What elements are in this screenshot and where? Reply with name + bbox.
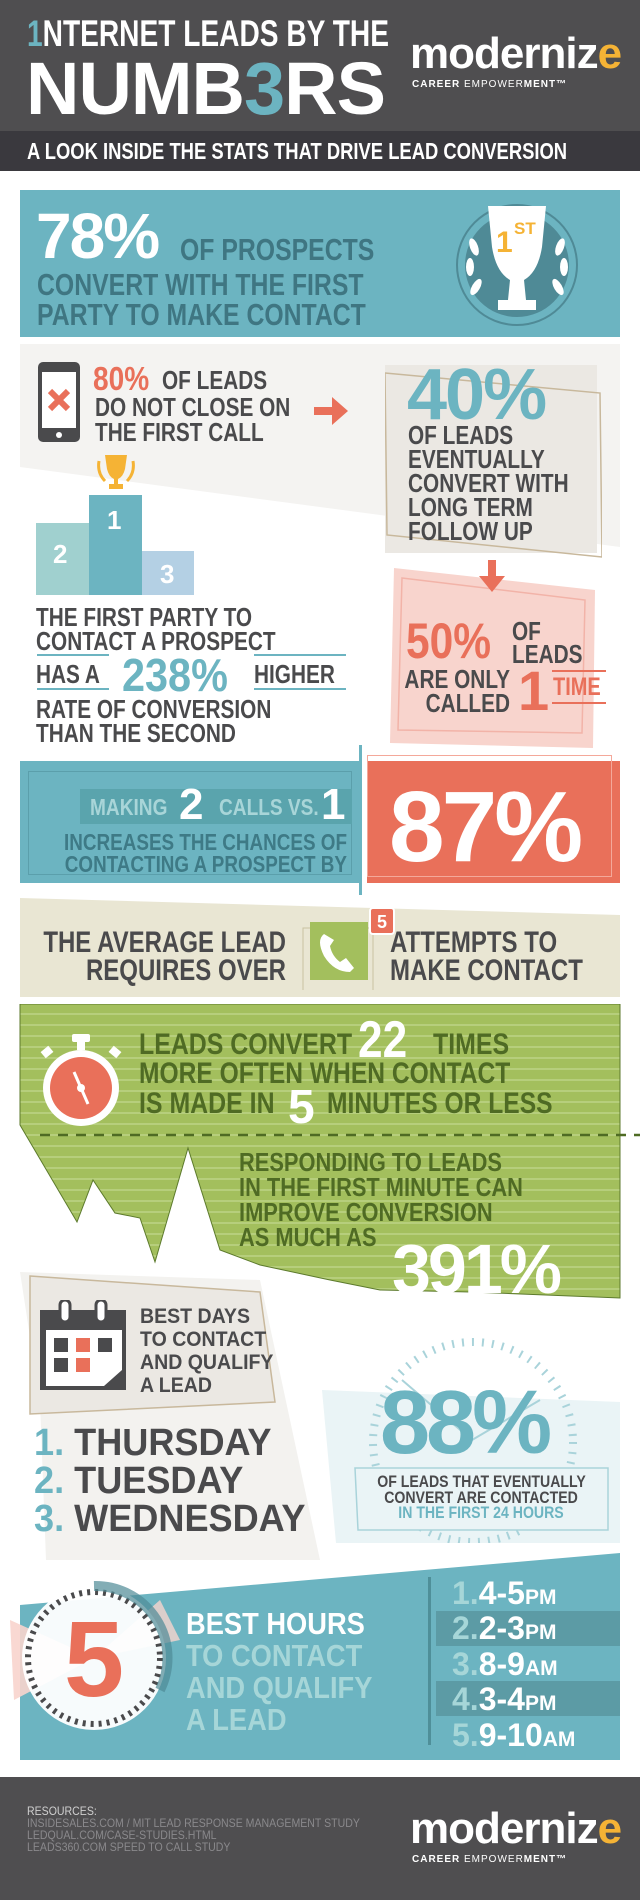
list: best hours: 4.3-4PM: [452, 1681, 556, 1717]
panel: best days: BEST DAYS: [140, 1305, 250, 1328]
panel: 50% called once: 1: [518, 659, 549, 722]
panel: best days: TO CONTACT: [140, 1328, 266, 1351]
panel: 87%: 87%: [389, 771, 580, 883]
text: 238% higher rate: THE FIRST PARTY TO: [36, 602, 252, 632]
panel: 2 calls vs 1: CONTACTING A PROSPECT BY: [65, 851, 347, 877]
list: best hours: 1.4-5PM: [452, 1575, 556, 1611]
panel: best hours: [10, 1553, 620, 1760]
panel: 87%: [367, 761, 620, 883]
resources: RESOURCES:: [27, 1804, 97, 1818]
panel: green 5 minutes / first minute: 22: [358, 1011, 407, 1069]
panel: best days: AND QUALIFY: [140, 1351, 273, 1374]
stat 78%: 78%: [36, 200, 158, 272]
icon: clock with 5: 5: [64, 1598, 124, 1719]
icon: calendar: [40, 1300, 126, 1390]
panel: 2 calls vs 1: CALLS VS.: [219, 794, 319, 820]
text: 238% higher rate: HIGHER: [254, 659, 335, 689]
text: 238% higher rate: [36, 602, 346, 748]
arrow: down: [479, 560, 505, 592]
icon: trophy 1st: ST: [514, 219, 536, 238]
list: best hours: 2.2-3PM: [452, 1610, 556, 1646]
icon: phone with badge 5: [302, 908, 395, 990]
icon: trophy 1st: 1: [496, 226, 513, 259]
icon: phone with badge 5: 5: [377, 912, 387, 932]
panel: green 5 minutes / first minute: 5: [288, 1081, 315, 1134]
panel: 88% first 24 hours: CONVERT ARE CONTACTED: [384, 1488, 578, 1506]
panel: 40% long term follow up: LONG TERM: [408, 492, 533, 522]
panel: 2 calls vs 1: MAKING: [90, 794, 167, 820]
panel: green 5 minutes / first minute: IS MADE IN: [139, 1087, 275, 1120]
panel: best hours: A LEAD: [186, 1702, 287, 1737]
list: best hours: [436, 1575, 620, 1753]
panel: 50% called once: ARE ONLY: [404, 664, 510, 694]
footer: [0, 1777, 640, 1900]
text 78%: PARTY TO MAKE CONTACT: [37, 297, 366, 332]
panel: average lead 5 attempts: REQUIRES OVER: [86, 954, 286, 987]
text: 80% of leads: OF LEADS: [162, 365, 267, 395]
panel: 50% called once: LEADS: [512, 639, 582, 669]
panel background: section 2: [20, 344, 620, 547]
panel: 50% called once: OF: [512, 616, 541, 646]
panel: 50% called once: 50%: [406, 613, 491, 669]
text: 80% of leads: 80%: [93, 360, 149, 397]
header: [0, 0, 640, 131]
panel: 50% called once: CALLED: [426, 688, 510, 718]
panel: 88% first 24 hours: [322, 1338, 620, 1543]
panel: green 5 minutes / first minute: 391%: [392, 1230, 559, 1308]
logo: CAREER EMPOWERMENT™: [412, 79, 567, 90]
text 78%: OF PROSPECTS: [180, 232, 374, 267]
panel: average lead 5 attempts: MAKE CONTACT: [390, 954, 583, 987]
panel: 88% first 24 hours: IN THE FIRST 24 HOURS: [398, 1503, 564, 1522]
logo: CAREER EMPOWERMENT™: [412, 1854, 567, 1865]
panel: 78% first party: [20, 190, 620, 337]
panel: green 5 minutes / first minute: MORE OFTEN WHEN CONTACT: [139, 1057, 510, 1090]
panel: best days: 1. THURSDAY: [34, 1422, 271, 1464]
panel: average lead 5 attempts: ATTEMPTS TO: [390, 926, 557, 959]
text: 80% of leads: THE FIRST CALL: [95, 417, 264, 447]
icon: gold trophy: [97, 455, 135, 489]
resources: LEADS360.COM SPEED TO CALL STUDY: [27, 1840, 230, 1854]
podium with trophy: 1: [107, 505, 121, 535]
icon: stopwatch: [40, 1034, 122, 1126]
panel: 2 calls vs 1: [20, 761, 360, 883]
panel: best days: 3. WEDNESDAY: [34, 1498, 306, 1540]
icon: clock with 5: [10, 1581, 180, 1730]
panel: 40% long term follow up: [385, 355, 602, 558]
panel: 40% long term follow up: FOLLOW UP: [408, 516, 533, 546]
arrow: right: [314, 397, 348, 425]
panel: green 5 minutes / first minute: LEADS CONVERT: [139, 1028, 352, 1061]
panel: 50% called once: [390, 568, 606, 748]
resources: LEDQUAL.COM/CASE-STUDIES.HTML: [27, 1828, 217, 1842]
panel: best days: 2. TUESDAY: [34, 1460, 243, 1502]
panel: 40% long term follow up: OF LEADS: [408, 420, 513, 450]
panel: 2 calls vs 1: 2: [179, 780, 203, 829]
panel: green 5 minutes / first minute: IMPROVE CONVERSION: [239, 1197, 493, 1227]
panel: green 5 minutes / first minute: [20, 1004, 640, 1308]
panel: average lead 5 attempts: THE AVERAGE LEAD: [43, 926, 286, 959]
panel: green 5 minutes / first minute: TIMES: [433, 1028, 509, 1061]
text: 238% higher rate: RATE OF CONVERSION: [36, 694, 271, 724]
resources: [27, 1804, 360, 1854]
subtitle bar: A LOOK INSIDE THE STATS THAT DRIVE LEAD CONVERSION: [27, 138, 567, 164]
panel: best hours: BEST HOURS: [186, 1606, 365, 1641]
text: 80% of leads: [93, 360, 290, 447]
panel: 40% long term follow up: 40%: [407, 355, 545, 435]
panel: 40% long term follow up: CONVERT WITH: [408, 468, 569, 498]
panel: 88% first 24 hours: OF LEADS THAT EVENTUALLY: [377, 1472, 586, 1491]
text 78%: [37, 232, 374, 332]
logo: modernize: [410, 1804, 621, 1853]
list: best hours: 3.8-9AM: [452, 1646, 558, 1682]
panel: green 5 minutes / first minute: MINUTES OR LESS: [327, 1087, 553, 1120]
icon: trophy 1st: [456, 204, 578, 326]
panel: best hours: TO CONTACT: [186, 1638, 362, 1673]
panel: green 5 minutes / first minute: IN THE FIRST MINUTE CAN: [239, 1172, 523, 1202]
icon: phone with x: [38, 362, 80, 442]
text: 238% higher rate: 238%: [122, 649, 228, 701]
divider line: [359, 745, 362, 895]
panel: best days: [20, 1272, 320, 1560]
logo: modernize: [410, 29, 621, 78]
text: 238% higher rate: THAN THE SECOND: [36, 718, 236, 748]
podium with trophy: [36, 455, 194, 595]
panel: best hours: AND QUALIFY: [186, 1670, 372, 1705]
text 78%: CONVERT WITH THE FIRST: [37, 267, 364, 302]
panel: 2 calls vs 1: INCREASES THE CHANCES OF: [64, 829, 347, 855]
podium with trophy: 2: [53, 539, 67, 569]
resources: INSIDESALES.COM / MIT LEAD RESPONSE MANAGEMENT STUDY: [27, 1816, 360, 1830]
panel: 2 calls vs 1: 1: [321, 780, 345, 829]
subtitle bar: [0, 131, 640, 171]
panel: best days: A LEAD: [140, 1374, 212, 1397]
text: 80% of leads: DO NOT CLOSE ON: [95, 392, 290, 422]
panel: 40% long term follow up: EVENTUALLY: [408, 444, 545, 474]
podium with trophy: 3: [160, 559, 174, 589]
panel: green 5 minutes / first minute: RESPONDING TO LEADS: [239, 1147, 502, 1177]
panel: green 5 minutes / first minute: AS MUCH AS: [239, 1222, 377, 1252]
title line 1: 1NTERNET LEADS BY THE: [27, 13, 389, 54]
title line 2: NUMB3RS: [26, 47, 385, 130]
text: 238% higher rate: HAS A: [36, 659, 100, 689]
panel: average lead 5 attempts: [20, 898, 620, 997]
list: best hours: 5.9-10AM: [452, 1717, 575, 1753]
text: 238% higher rate: CONTACT A PROSPECT: [36, 626, 276, 656]
panel: 88% first 24 hours: 88%: [380, 1373, 548, 1473]
panel: 50% called once: TIME: [553, 673, 601, 701]
